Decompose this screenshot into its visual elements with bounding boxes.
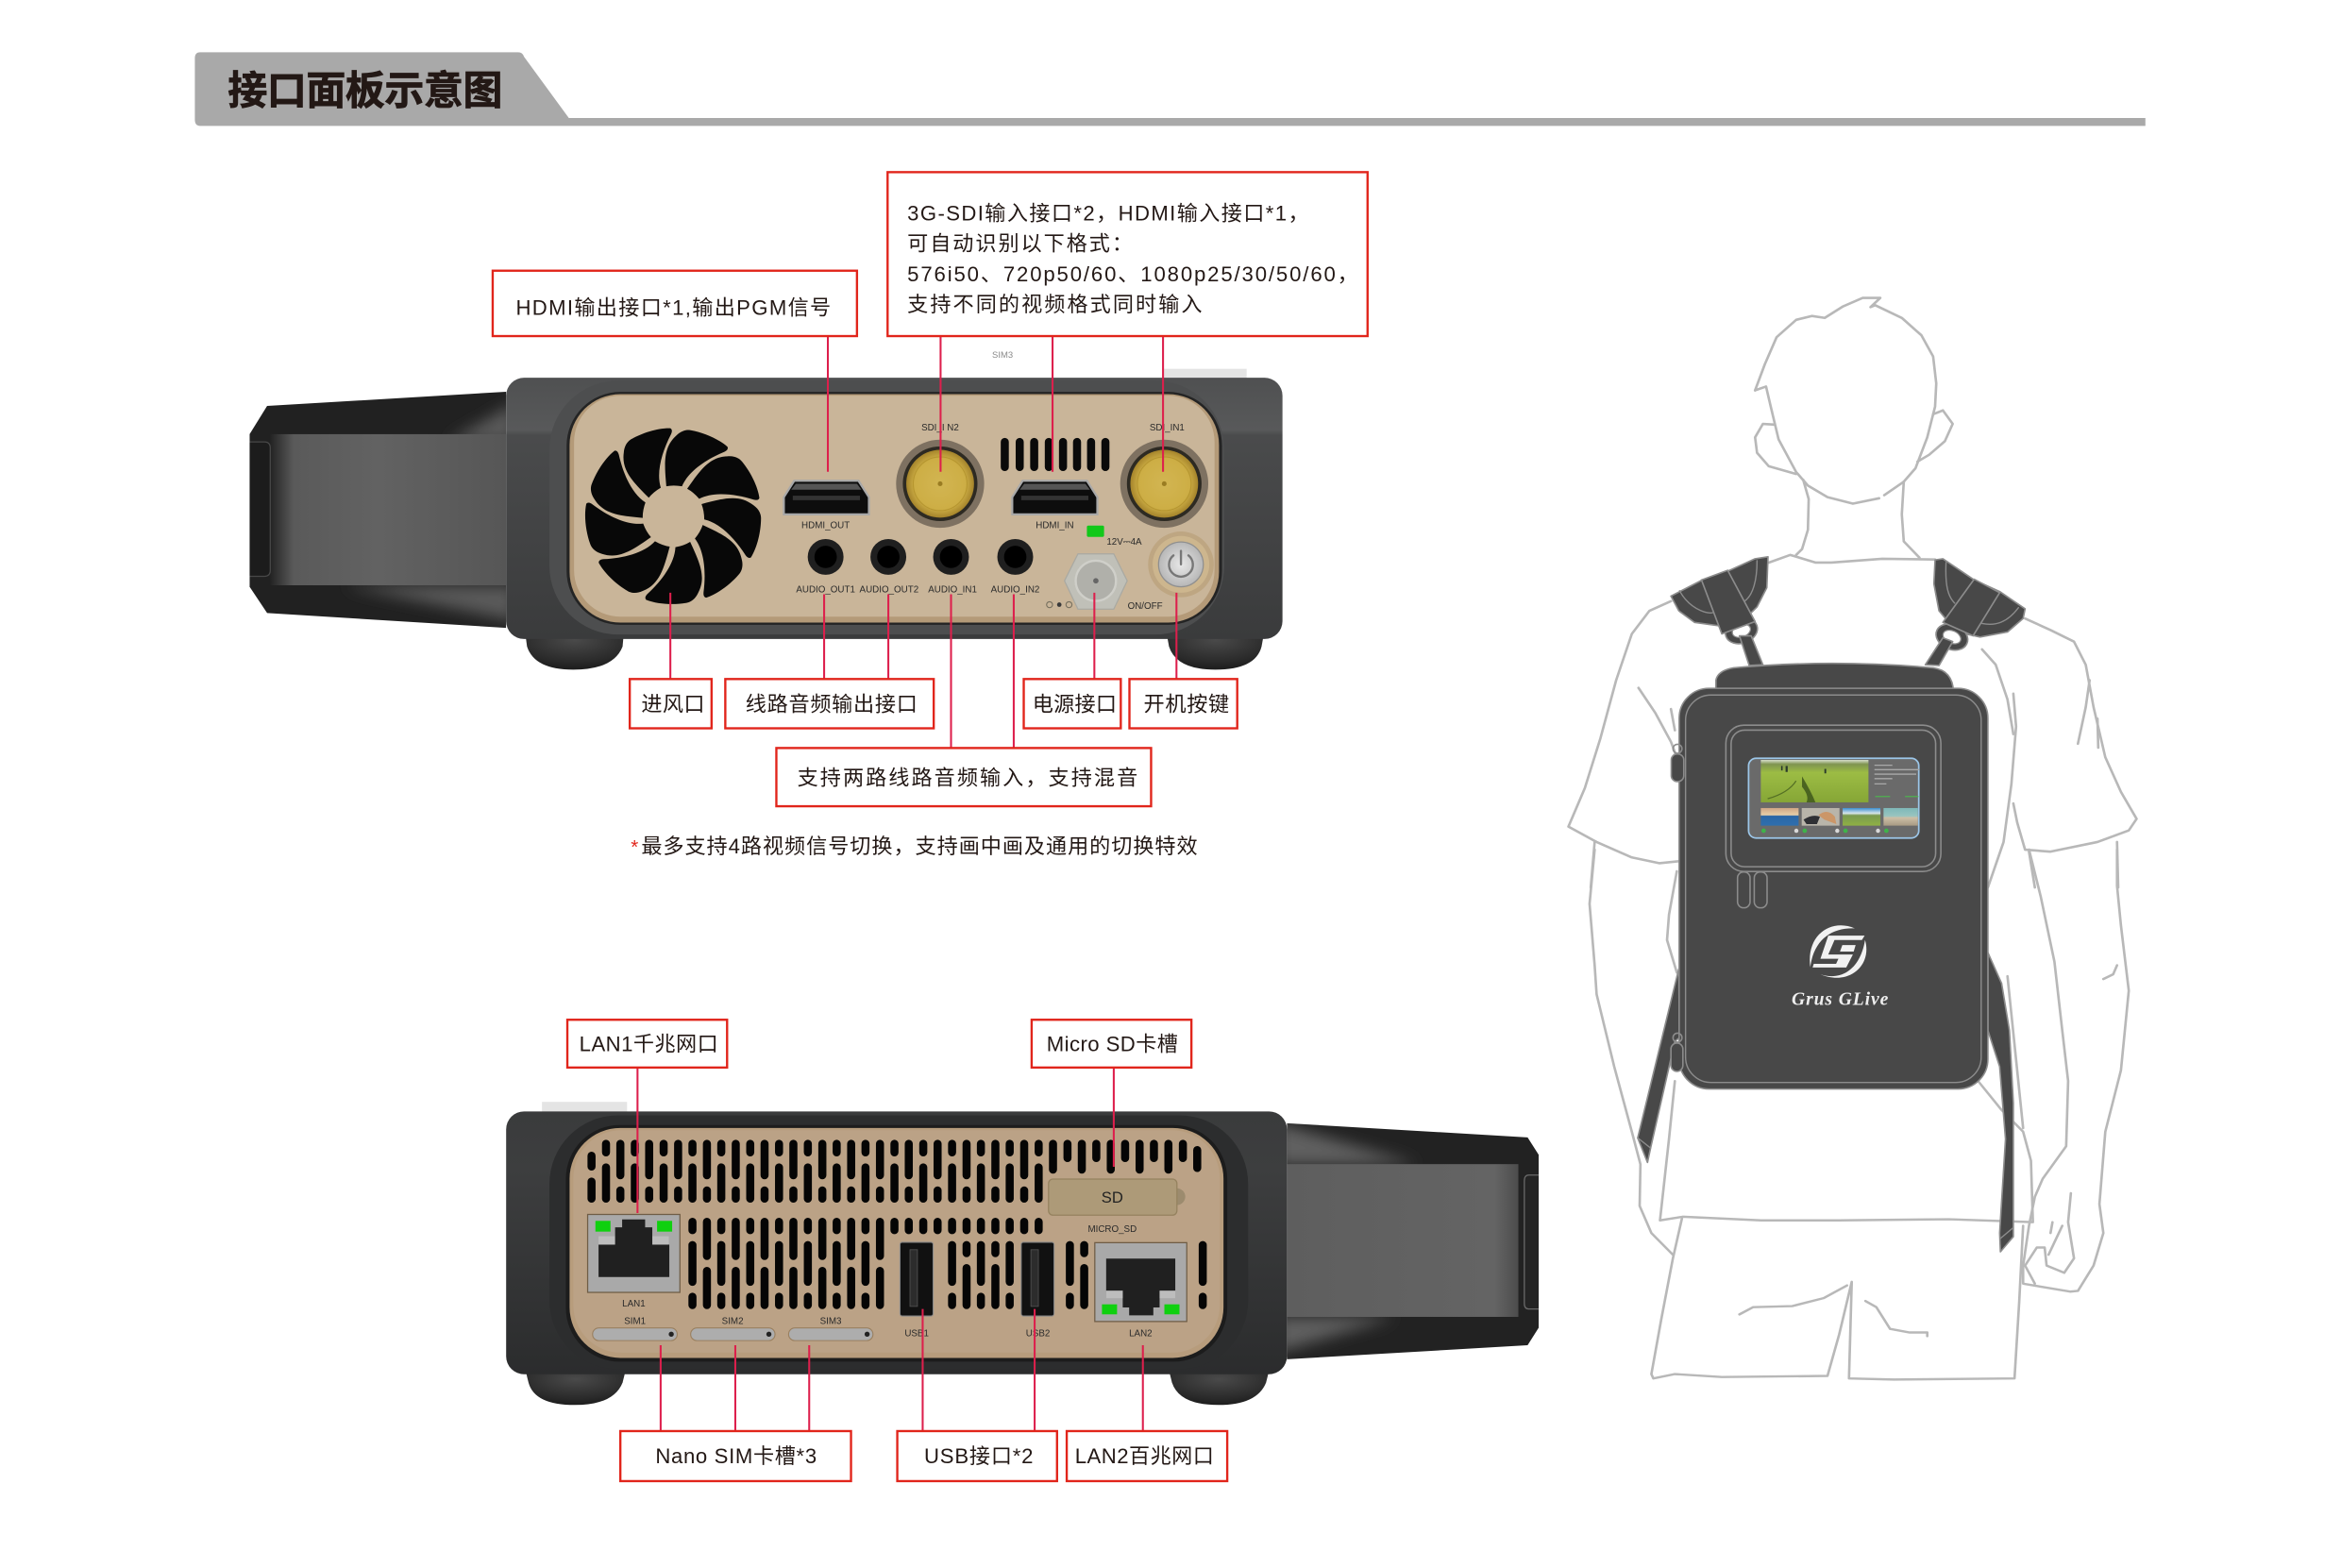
source thumbnails [1760,808,1918,826]
port: SDI IN1 [1120,423,1208,528]
port: USB1: USB1 [904,1328,929,1339]
backpack body [1679,688,1988,1089]
thumbnail controls [1761,829,1889,833]
callout: LAN2 [1067,1431,1227,1481]
SIM slots: SIM3 [820,1317,842,1327]
tan panel [569,1128,1223,1357]
side zip pulls [1671,744,1684,1071]
callout: LAN1: LAN1千兆网口 [580,1032,718,1055]
SIM slots: SIM2 [722,1317,744,1327]
callout: power port: 电源接口 [1033,692,1117,716]
callout: power key [1130,679,1238,729]
handle (left side) [249,392,506,629]
infographic canvas [194,52,2146,1482]
SD card slot [1049,1179,1186,1235]
logo mark [1810,925,1866,978]
screen display [1748,758,1919,838]
power connector [1047,537,1142,609]
rubber feet [525,630,1265,669]
SD card slot: SD [1102,1189,1123,1206]
backpack top cap [1716,664,1953,692]
vents [592,1144,1203,1305]
power connector: 12V⎓4A [1106,537,1142,548]
illustration: person wearing backpack [1569,298,2136,1379]
device: front interface panel [239,369,1283,669]
port: LAN1: LAN1 [622,1299,646,1309]
port: USB2 [1021,1242,1054,1339]
SIM slots: SIM1 [624,1317,646,1327]
device: rear interface panel [506,1102,1545,1405]
port: HDMI out: HDMI_OUT [801,520,850,531]
ports: audio jacks: AUDIO_OUT2 [860,584,918,595]
callout: power key: 开机按键 [1144,692,1229,716]
ports: audio jacks: AUDIO_OUT1 [796,584,855,595]
callout: power port [1024,679,1120,729]
callout: audio output: 线路音频输出接口 [746,692,918,716]
port: SDI IN1: SDI_IN1 [1150,423,1185,433]
person outline lower [1590,850,2129,1379]
callout: input formats: 支持不同的视频格式同时输入 [907,293,1203,316]
body shell [506,378,1283,639]
section header: 接口面板示意图 [194,52,2146,126]
port: USB1 [900,1242,934,1339]
callout: LAN2: LAN2百兆网口 [1075,1444,1214,1468]
person outline upper [1569,298,2136,887]
port: HDMI in [1012,481,1098,531]
callout: Nano SIM [620,1431,851,1481]
body shell [506,1111,1287,1374]
footnote: 最多支持4路视频信号切换，支持画中画及通用的切换特效 [641,835,1198,858]
callout leaders: front panel [670,336,1176,748]
vent slots [1004,442,1105,467]
screen pocket [1726,725,1941,871]
callout: Micro SD [1032,1020,1191,1068]
callout: Nano SIM: Nano SIM卡槽*3 [655,1444,817,1468]
callout: Micro SD: Micro SD卡槽 [1047,1032,1178,1055]
port: LAN2: LAN2 [1129,1328,1153,1339]
SIM slots [593,1317,873,1340]
ports: audio jacks: AUDIO_IN1 [928,584,977,595]
fan intake [571,415,770,615]
ports: audio jacks: AUDIO_IN2 [991,584,1039,595]
ports: audio jacks [796,539,1039,595]
white bracket [1163,369,1247,379]
callout: audio input [776,748,1151,806]
zipper pulls [1738,872,1767,908]
callout leaders: rear panel [637,1068,1143,1430]
tan panel [569,395,1219,623]
footnote: * [631,836,638,858]
callout: input formats: 可自动识别以下格式： [907,232,1133,256]
rubber feet [526,1371,1269,1405]
white bracket [542,1102,627,1112]
callout: input formats [887,172,1368,336]
callout: USB: USB接口*2 [924,1444,1033,1468]
port: SDI IN2: SDI_I N2 [921,423,959,433]
main video frame [1760,760,1868,802]
port: USB2: USB2 [1026,1328,1050,1339]
port: SDI IN2 [896,423,985,528]
power button [1128,531,1214,612]
SD card slot: MICRO_SD [1087,1224,1137,1235]
port: HDMI in: HDMI_IN [1036,520,1074,531]
callout: air intake: 进风口 [641,692,705,716]
inner frame [549,380,1224,634]
callout: audio input: 支持两路线路音频输入，支持混音 [798,767,1137,790]
lower vent block [693,1222,1203,1305]
power button: ON/OFF [1128,601,1163,612]
callout: HDMI output [493,271,857,336]
port: LAN1 [588,1214,680,1309]
small stray label SIM3: SIM3 [992,350,1013,361]
callout: input formats: 576i50、720p50/60、1080p25/30/50/60， [907,262,1358,286]
port: HDMI out [783,481,869,531]
port: LAN2 [1095,1242,1187,1339]
lower backpack straps [1638,953,2013,1252]
callout: input formats: 3G-SDI输入接口*2，HDMI输入接口*1， [907,201,1309,225]
callout: HDMI output: HDMI输出接口*1,输出PGM信号 [515,296,831,320]
title: 接口面板示意图 [227,69,502,113]
upper vent block [592,1144,1197,1199]
inner frame [549,1115,1248,1369]
shoulder straps [1671,557,2025,666]
Grus GLive logo [1792,925,1889,1009]
callout: audio output [725,679,934,729]
callout: LAN1 [567,1020,727,1068]
handle (right side) [1287,1123,1539,1359]
indicator LED [1086,526,1104,537]
callout: USB [898,1431,1057,1481]
callout: air intake [630,679,712,729]
header tab and rule [194,52,2146,126]
info side panel [1875,766,1919,797]
logo wordmark: Grus GLive [1792,989,1889,1009]
